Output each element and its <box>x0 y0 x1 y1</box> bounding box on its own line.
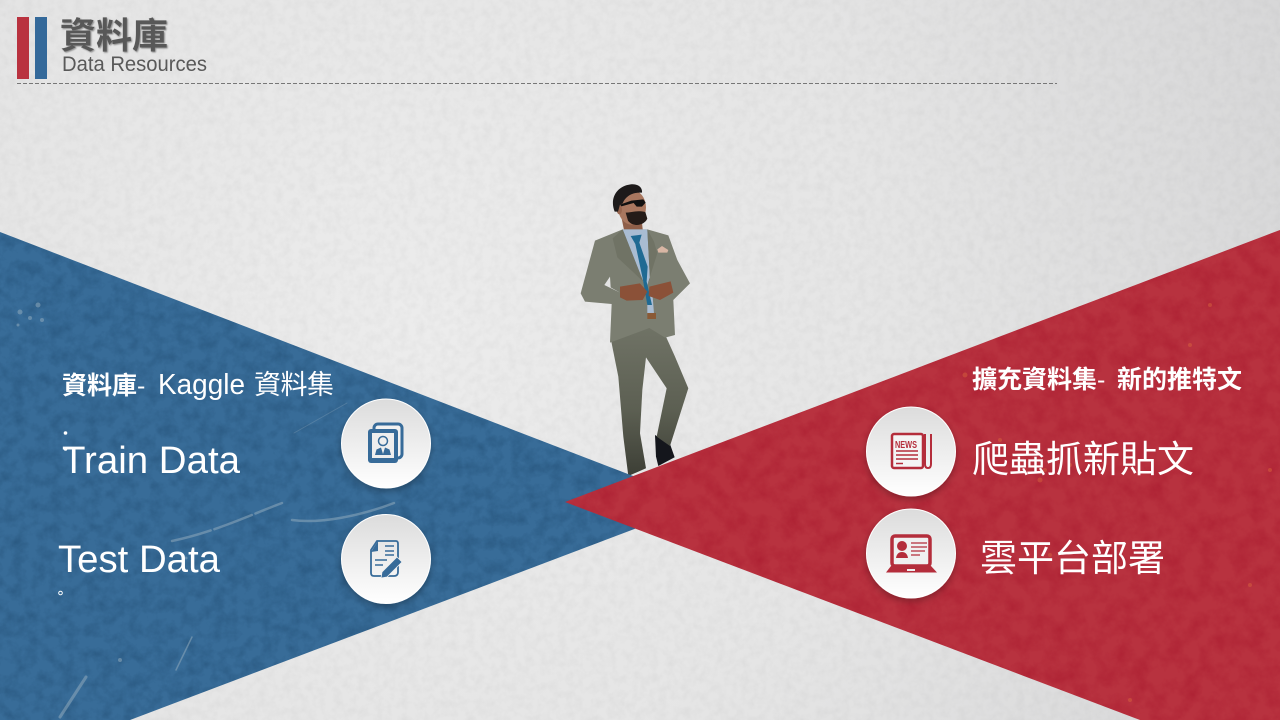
shirt placket below buttons <box>647 297 654 313</box>
sunglasses <box>620 199 646 207</box>
icon badge: newspaper: NEWS <box>895 440 917 451</box>
right heading: expanded dataset: 擴充資料集 <box>972 360 1097 396</box>
small ideographic mark <box>59 591 62 595</box>
label: Test Data: Test Data <box>58 539 221 581</box>
label: Train Data: Train Data <box>62 440 241 482</box>
belt <box>647 313 656 319</box>
jacket <box>581 229 690 343</box>
ear <box>617 206 622 214</box>
trousers <box>611 323 688 476</box>
lapel right <box>647 229 657 285</box>
subtitle: Data Resources <box>62 53 207 76</box>
left heading: Kaggle dataset: 資料庫 <box>62 366 137 402</box>
red triangle panel <box>565 230 1280 720</box>
label: crawl new posts: 爬蟲抓新貼文 <box>972 429 1194 483</box>
left heading: Kaggle dataset: 資料集 <box>254 363 334 402</box>
neck <box>621 213 643 235</box>
left heading: Kaggle dataset <box>62 363 334 402</box>
beard <box>626 211 647 225</box>
pocket square <box>657 246 668 253</box>
businessman figure <box>581 184 690 476</box>
label: cloud deployment: 雲平台部署 <box>980 528 1165 582</box>
blue triangle panel <box>0 232 703 720</box>
title: 資料庫 <box>60 7 168 59</box>
icon badge: newspaper <box>866 407 956 496</box>
tie <box>631 235 652 305</box>
stray bullet marks <box>64 431 67 451</box>
icon badge: laptop profile <box>866 509 956 598</box>
arm gap <box>604 277 620 293</box>
header accent bars <box>17 17 47 79</box>
left heading: Kaggle dataset: Kaggle <box>158 369 245 401</box>
face <box>618 190 646 225</box>
lapel left <box>613 229 643 282</box>
right heading: expanded dataset: - <box>1097 366 1105 394</box>
left heading: Kaggle dataset: - <box>137 372 145 400</box>
hands <box>620 283 647 301</box>
shoe <box>655 435 675 466</box>
shirt <box>623 229 650 285</box>
icon badge: document and pencil <box>342 514 430 604</box>
hair <box>613 184 642 212</box>
right heading: expanded dataset <box>972 360 1242 396</box>
icon badge: portrait cards <box>342 399 430 488</box>
right heading: expanded dataset: 新的推特文 <box>1117 360 1242 396</box>
